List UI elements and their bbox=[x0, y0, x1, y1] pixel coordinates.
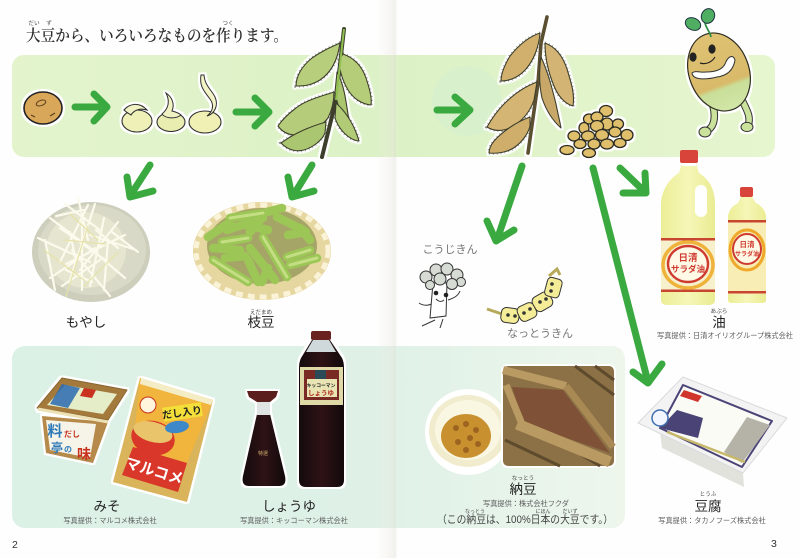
label: tofu: とうふ bbox=[700, 491, 717, 498]
arrow: green plant to dried plant bbox=[437, 97, 470, 124]
label: soy sauce: しょうゆ bbox=[262, 499, 316, 514]
arrow: bean to sprouts bbox=[75, 94, 107, 121]
pod fringe bbox=[278, 43, 371, 151]
photo: soy sauce dispenser bbox=[243, 391, 285, 486]
sprout leaves bbox=[705, 23, 711, 37]
label: miso: 写真提供：マルコメ株式会社 bbox=[63, 516, 157, 525]
photo: cooking oil bottles bbox=[661, 150, 766, 305]
title: ず bbox=[46, 19, 52, 27]
label: miso bbox=[63, 499, 157, 525]
title: 大豆から、いろいろなものを作ります。 bbox=[26, 27, 288, 45]
page number 3: 3 bbox=[771, 538, 777, 550]
photo: miso cup: 味 bbox=[77, 446, 91, 462]
photo: miso cup: だし bbox=[64, 430, 80, 439]
label: natto bbox=[437, 475, 613, 526]
photo: miso cup bbox=[37, 378, 127, 463]
photo: miso bag: だし入り bbox=[161, 404, 203, 422]
photo: edamame in basket bbox=[193, 202, 331, 300]
icon: edamame branch bbox=[278, 29, 371, 157]
photo: soy sauce bottle: キッコーマン bbox=[307, 383, 336, 389]
photo: soy sauce bottle bbox=[299, 331, 344, 487]
label: oil bbox=[657, 308, 793, 340]
label: natto: 納豆 bbox=[510, 482, 536, 497]
arms bbox=[692, 57, 735, 79]
page number 2: 2 bbox=[12, 539, 18, 551]
photo: tofu pack bbox=[638, 377, 787, 487]
legs bbox=[706, 106, 714, 131]
photo: natto in straw bbox=[501, 364, 616, 468]
photo: miso bag bbox=[113, 378, 213, 502]
photo: miso cup: 亭 bbox=[51, 440, 63, 455]
pod fringe bbox=[487, 33, 574, 153]
icon: koji mold character bbox=[419, 263, 466, 328]
icon: soybean mascot bbox=[677, 6, 761, 137]
body bbox=[677, 24, 761, 120]
stem bbox=[322, 29, 344, 157]
photo: soy sauce bottle: しょうゆ bbox=[308, 388, 334, 397]
icon: natto bacteria character bbox=[487, 269, 563, 324]
arrow: to edamame bbox=[288, 165, 314, 197]
large oil bottle bbox=[661, 150, 715, 305]
arrow: to microbes bbox=[487, 166, 522, 241]
panel: soybean growth band bbox=[12, 55, 775, 157]
sprout one bbox=[122, 104, 152, 132]
label: tofu: 写真提供：タカノフーズ株式会社 bbox=[658, 516, 766, 525]
photo: miso cup: の bbox=[64, 445, 72, 454]
icon: soybean bbox=[24, 92, 62, 124]
label: natto bacteria: なっとうきん bbox=[507, 327, 573, 340]
small oil bottle bbox=[728, 187, 766, 303]
label: soy sauce bbox=[240, 499, 348, 525]
label: natto: なっとう bbox=[512, 475, 534, 482]
label: soy sauce: 写真提供：キッコーマン株式会社 bbox=[240, 516, 348, 525]
label: koji: こうじきん bbox=[422, 243, 478, 256]
label: tofu: 豆腐 bbox=[694, 499, 722, 514]
face bbox=[689, 52, 697, 62]
arrow: to tofu bbox=[593, 168, 662, 383]
photo: natto plate bbox=[425, 389, 511, 475]
title: だい bbox=[28, 20, 40, 27]
arrow: to bean sprouts bbox=[127, 165, 153, 197]
label: oil: 油 bbox=[712, 315, 726, 330]
large oil bottle: 日清 bbox=[678, 252, 698, 264]
faint show-through circle bbox=[432, 66, 502, 136]
label: natto: なっとう bbox=[465, 508, 485, 515]
label: natto: 写真提供：株式会社フクダ bbox=[483, 499, 569, 508]
photo: bean sprouts on plate bbox=[32, 198, 150, 302]
label: miso: みそ bbox=[94, 499, 120, 514]
icon: dried soybean branch bbox=[487, 17, 574, 153]
label: edamame: えだまめ bbox=[250, 309, 273, 316]
photo: miso cup: 料 bbox=[47, 422, 63, 440]
page gutter shading bbox=[376, 0, 398, 558]
label: natto: だいず bbox=[562, 508, 578, 515]
sprout two bbox=[157, 93, 185, 132]
title bbox=[26, 19, 288, 45]
label: oil: 写真提供：日清オイリオグループ株式会社 bbox=[657, 331, 793, 340]
icon: sprouting beans bbox=[122, 75, 221, 133]
icon: soybean pile bbox=[560, 106, 633, 158]
label: oil: あぶら bbox=[711, 308, 727, 315]
label: natto: （この納豆は、100%日本の大豆です。） bbox=[437, 512, 613, 526]
small oil bottle: サラダ油 bbox=[735, 250, 759, 258]
panel: fermented foods bbox=[12, 346, 625, 528]
arrow: sprouts to green plant bbox=[236, 98, 269, 126]
photo: miso bag: マルコメ bbox=[123, 455, 185, 488]
label: edamame: 枝豆 bbox=[248, 315, 274, 330]
label: natto: にほん bbox=[535, 509, 551, 515]
label: tofu bbox=[658, 491, 766, 525]
large oil bottle: サラダ油 bbox=[671, 264, 705, 274]
sprout three bbox=[189, 75, 221, 133]
label: moyashi: もやし bbox=[66, 315, 106, 330]
photo: soy sauce dispenser: 特選 bbox=[258, 450, 268, 457]
title: つく bbox=[222, 21, 234, 27]
arrow: to oil bbox=[620, 168, 646, 193]
small oil bottle: 日清 bbox=[740, 239, 755, 249]
